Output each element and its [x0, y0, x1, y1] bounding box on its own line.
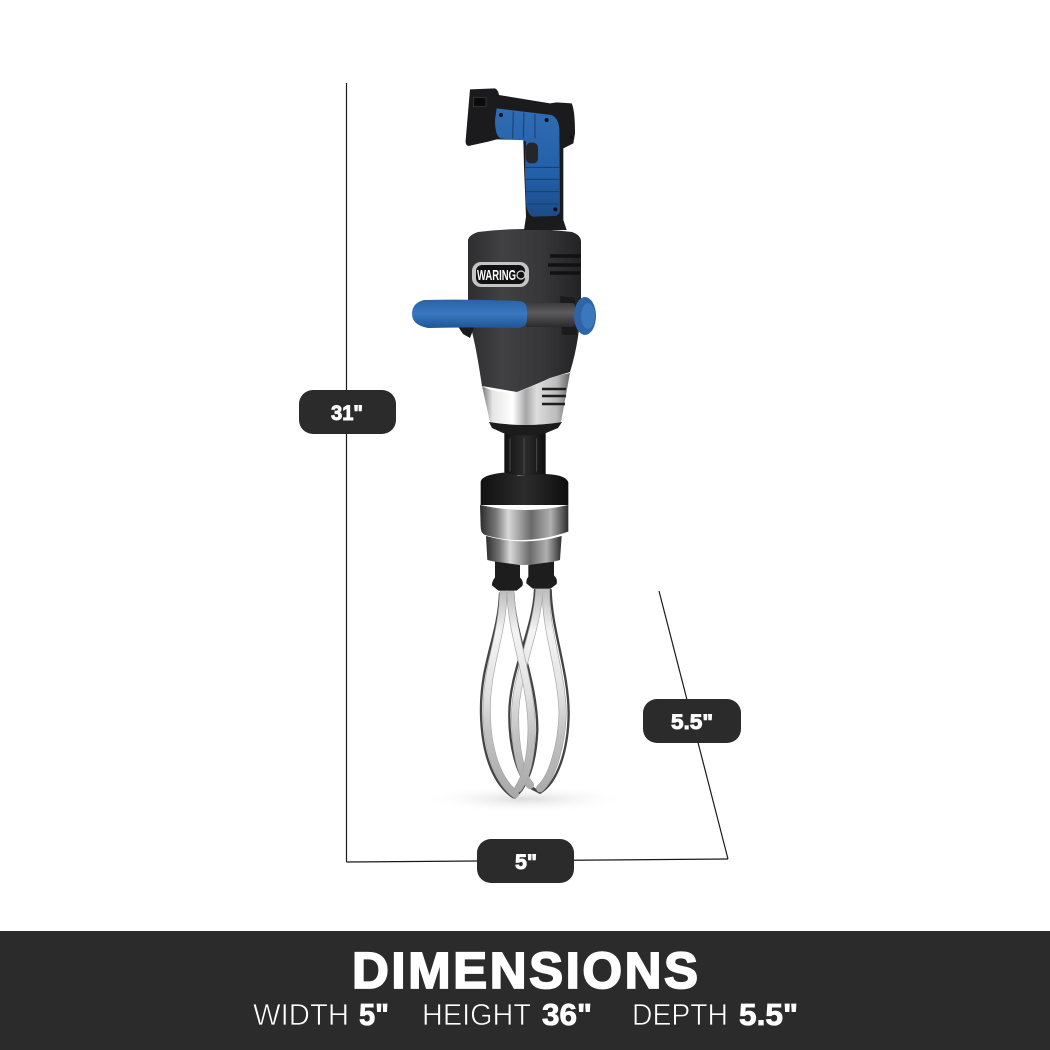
footer band	[0, 931, 1050, 1050]
footer dimension summary: 36"	[542, 997, 592, 1032]
whisk wires	[481, 590, 569, 797]
footer dimension summary: 5"	[359, 997, 389, 1032]
label: width 5 inches: 5"	[515, 851, 537, 874]
footer dimension summary: 5.5"	[739, 997, 798, 1032]
grip screws	[499, 113, 573, 211]
footer heading: DIMENSIONS	[352, 942, 698, 999]
motor body	[468, 229, 581, 392]
label: depth 5.5 inches	[643, 699, 741, 743]
dimension lines	[346, 83, 728, 862]
pistol grip handle	[466, 88, 575, 230]
black collar	[489, 422, 562, 436]
floor shadow	[420, 785, 630, 813]
lower steel ring	[486, 536, 562, 565]
footer dimension summary: WIDTH	[253, 997, 349, 1032]
shaft ribs	[510, 438, 537, 474]
blue loop	[412, 300, 527, 328]
handle frame	[466, 88, 575, 230]
label: width 5 inches	[477, 839, 574, 883]
footer dimension summary: HEIGHT	[422, 997, 531, 1032]
footer dimension summary	[253, 997, 798, 1032]
black coupling cap	[481, 473, 568, 505]
label: height 31 inches	[299, 390, 396, 434]
label: depth 5.5 inches: 5.5"	[671, 711, 713, 734]
bottom vents	[542, 389, 566, 404]
front handle bar with blue loop	[412, 296, 596, 338]
blender head: shaft, cap and steel collars	[480, 432, 568, 591]
grey rod	[525, 303, 575, 327]
label: height 31 inches: 31"	[331, 402, 363, 425]
rocker switch	[473, 97, 486, 107]
steel base band	[482, 373, 570, 425]
logo badge	[472, 262, 529, 287]
knob	[574, 297, 596, 335]
drive shaft	[504, 432, 546, 475]
upper steel ring	[480, 505, 568, 540]
thumb button	[526, 143, 538, 163]
footer dimension summary: DEPTH	[632, 997, 728, 1032]
blue grip	[495, 108, 560, 217]
grip ribs	[513, 112, 559, 204]
mount behind the bar	[457, 296, 577, 338]
logo badge: WARING	[477, 267, 516, 284]
whisk stems	[492, 562, 557, 591]
side vents	[548, 256, 581, 273]
product: immersion whisk mixer	[412, 88, 630, 813]
